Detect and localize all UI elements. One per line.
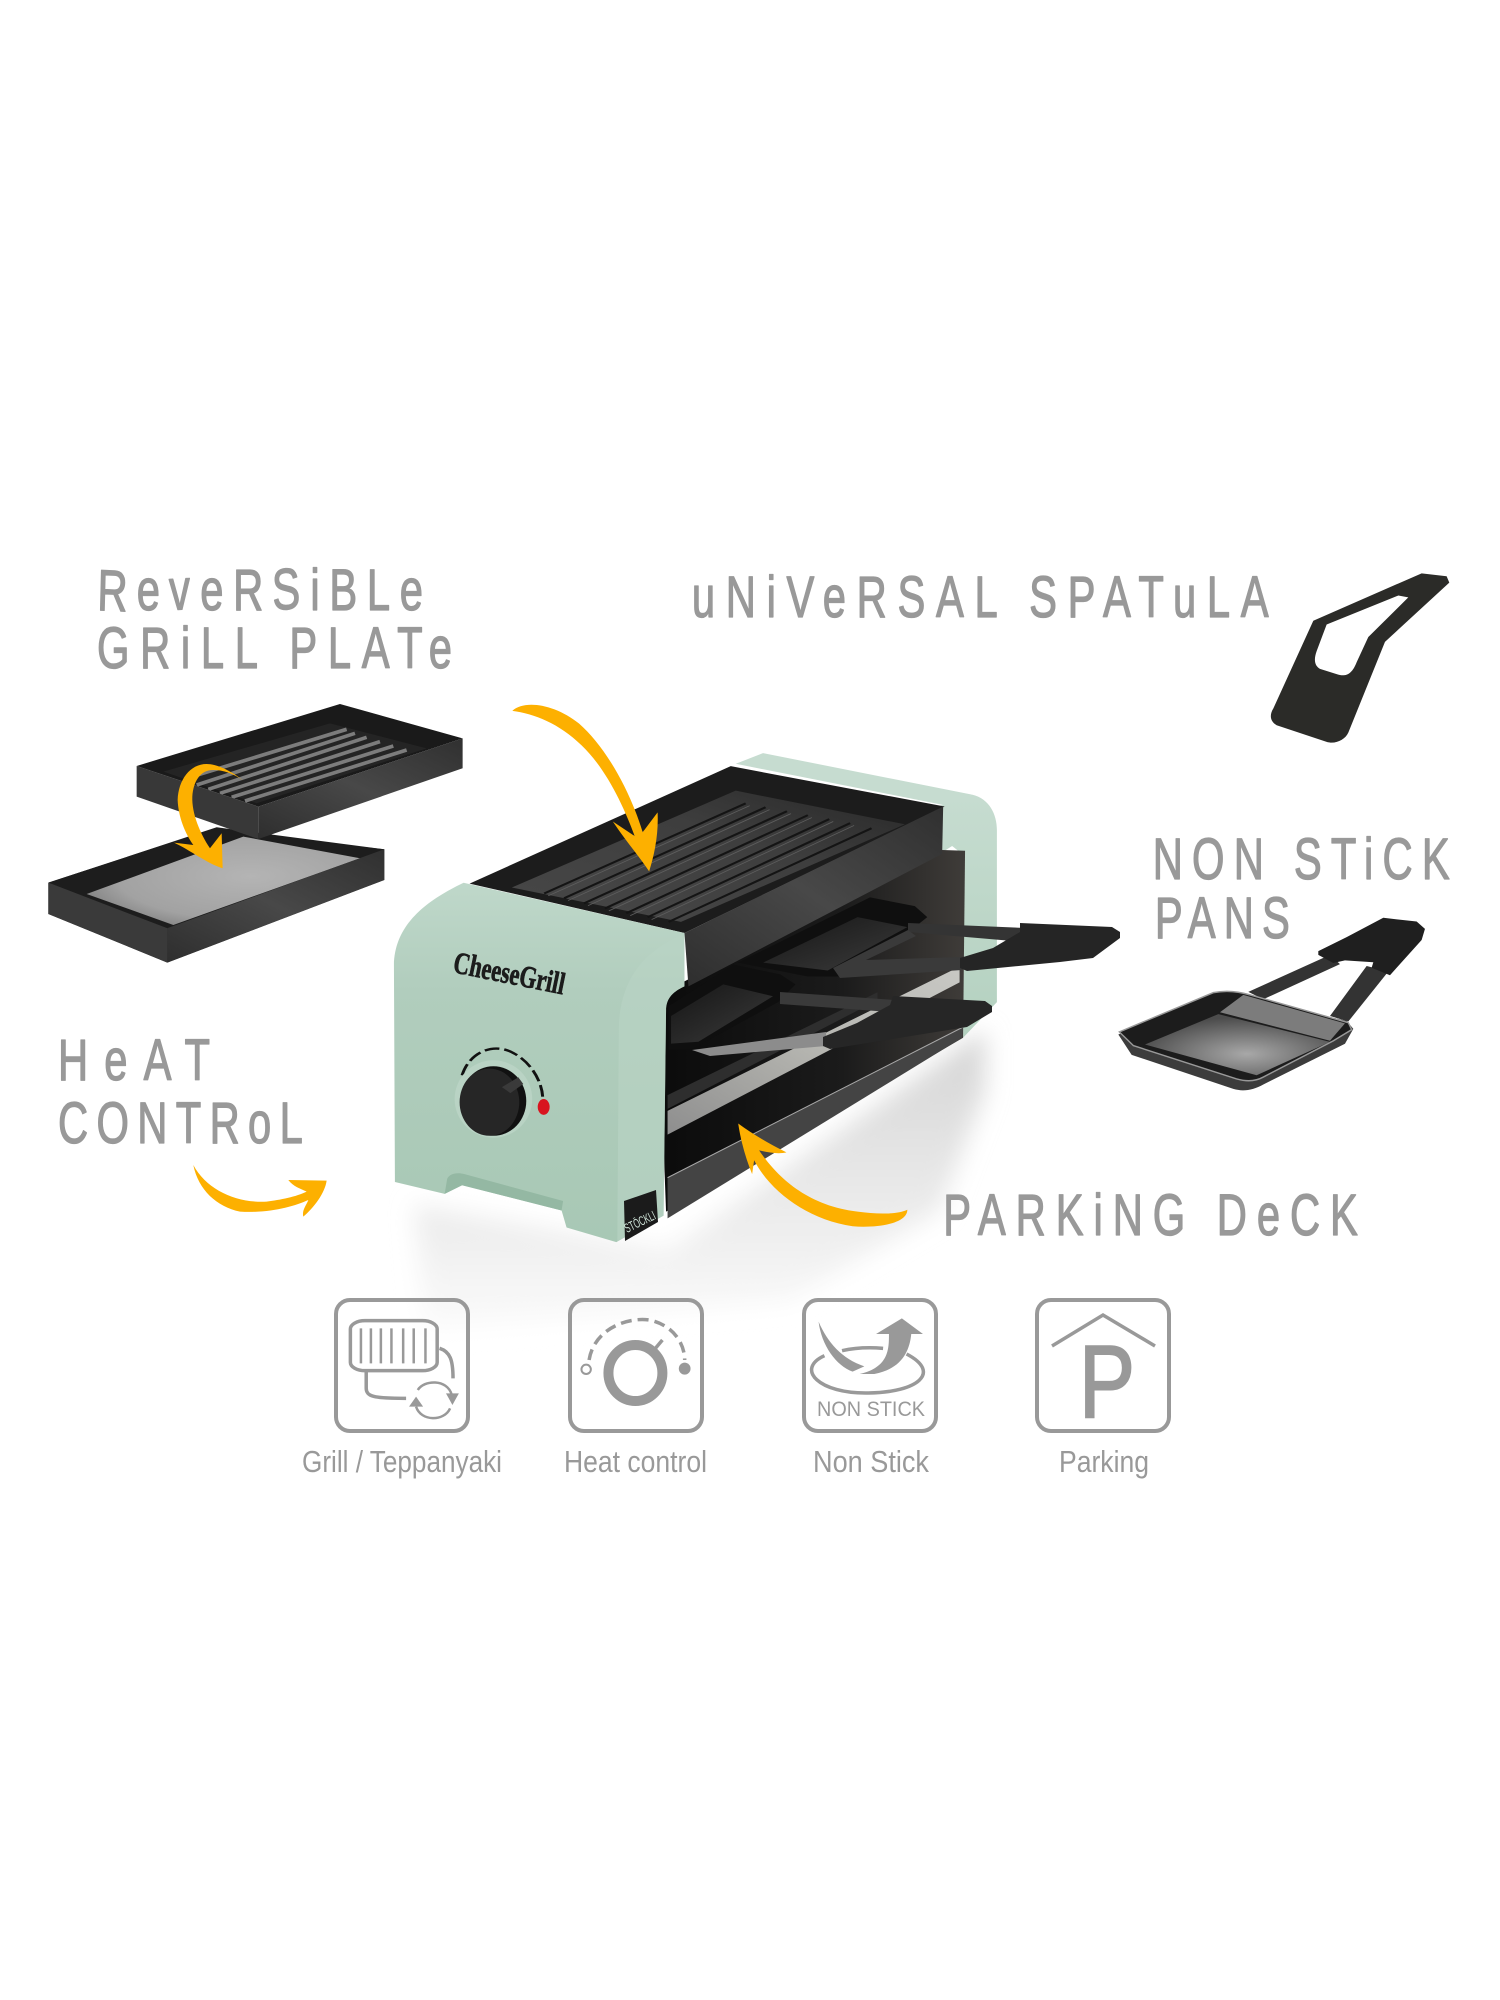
pan handle (1248, 918, 1425, 1022)
rear handle (833, 923, 1120, 978)
raclette grill appliance (394, 705, 1120, 1242)
arrow: flip plate (174, 764, 243, 868)
bottom tray (48, 827, 384, 963)
icon: grill teppanyaki (336, 1300, 468, 1431)
heading: reversible grill plate: GRiLL PLATe (97, 615, 452, 681)
arrow: parking deck (738, 1124, 907, 1227)
caption: grill teppanyaki: Grill / Teppanyaki (302, 1444, 502, 1479)
icon: parking (1037, 1300, 1169, 1439)
heading: reversible grill plate: ReveRSiBLe (97, 555, 423, 624)
foot recess (445, 1173, 563, 1210)
indicator light (538, 1099, 550, 1115)
caption: heat control: Heat control (564, 1444, 707, 1479)
heading: parking deck: PARKiNG DeCK (943, 1182, 1358, 1248)
brand name: CheeseGrill (451, 945, 569, 1001)
arrow: heat control (193, 1165, 327, 1217)
icon: parking: P (1079, 1324, 1135, 1439)
heading: heat control (58, 1027, 303, 1156)
control knob (455, 1060, 532, 1138)
heading: heat control: HeAT (58, 1027, 210, 1093)
interior cavity (659, 850, 965, 1218)
spatula illustration (1271, 573, 1449, 743)
pan body (1118, 991, 1353, 1090)
heading: heat control: CONTRoL (58, 1090, 303, 1156)
non stick pan illustration (1118, 918, 1425, 1090)
dial arc (462, 1049, 543, 1097)
heading: universal spatula: uNiVeRSAL SPATuLA (692, 564, 1269, 630)
back end panel (736, 753, 997, 1038)
front handle (692, 992, 992, 1056)
pan handles (692, 923, 1120, 1056)
heading: non stick pans: PANS (1155, 885, 1290, 951)
top tray with grill ribs (137, 704, 463, 839)
feature icons row (302, 1300, 1169, 1479)
arrow: grill plate (512, 705, 658, 871)
mint front body (394, 883, 684, 1242)
front body side band (617, 934, 684, 1241)
icon: non stick (804, 1300, 936, 1431)
reversible plate illustration (48, 704, 463, 963)
icon: heat control (570, 1300, 702, 1431)
icon: non stick: NON STICK (817, 1398, 925, 1421)
STOCKLI badge (622, 1190, 658, 1241)
caption: non stick: Non Stick (813, 1444, 929, 1479)
rear pan (738, 897, 927, 976)
heading: non stick pans: NON STiCK (1153, 826, 1450, 892)
caption: parking: Parking (1059, 1444, 1149, 1479)
STOCKLI badge: STÖCKLI (622, 1208, 658, 1236)
floor reflection under the grill (415, 1030, 985, 1330)
grill plate (470, 766, 945, 986)
heading: reversible grill plate (97, 555, 452, 681)
heading: non stick pans (1153, 826, 1450, 951)
front pan (669, 965, 795, 1050)
